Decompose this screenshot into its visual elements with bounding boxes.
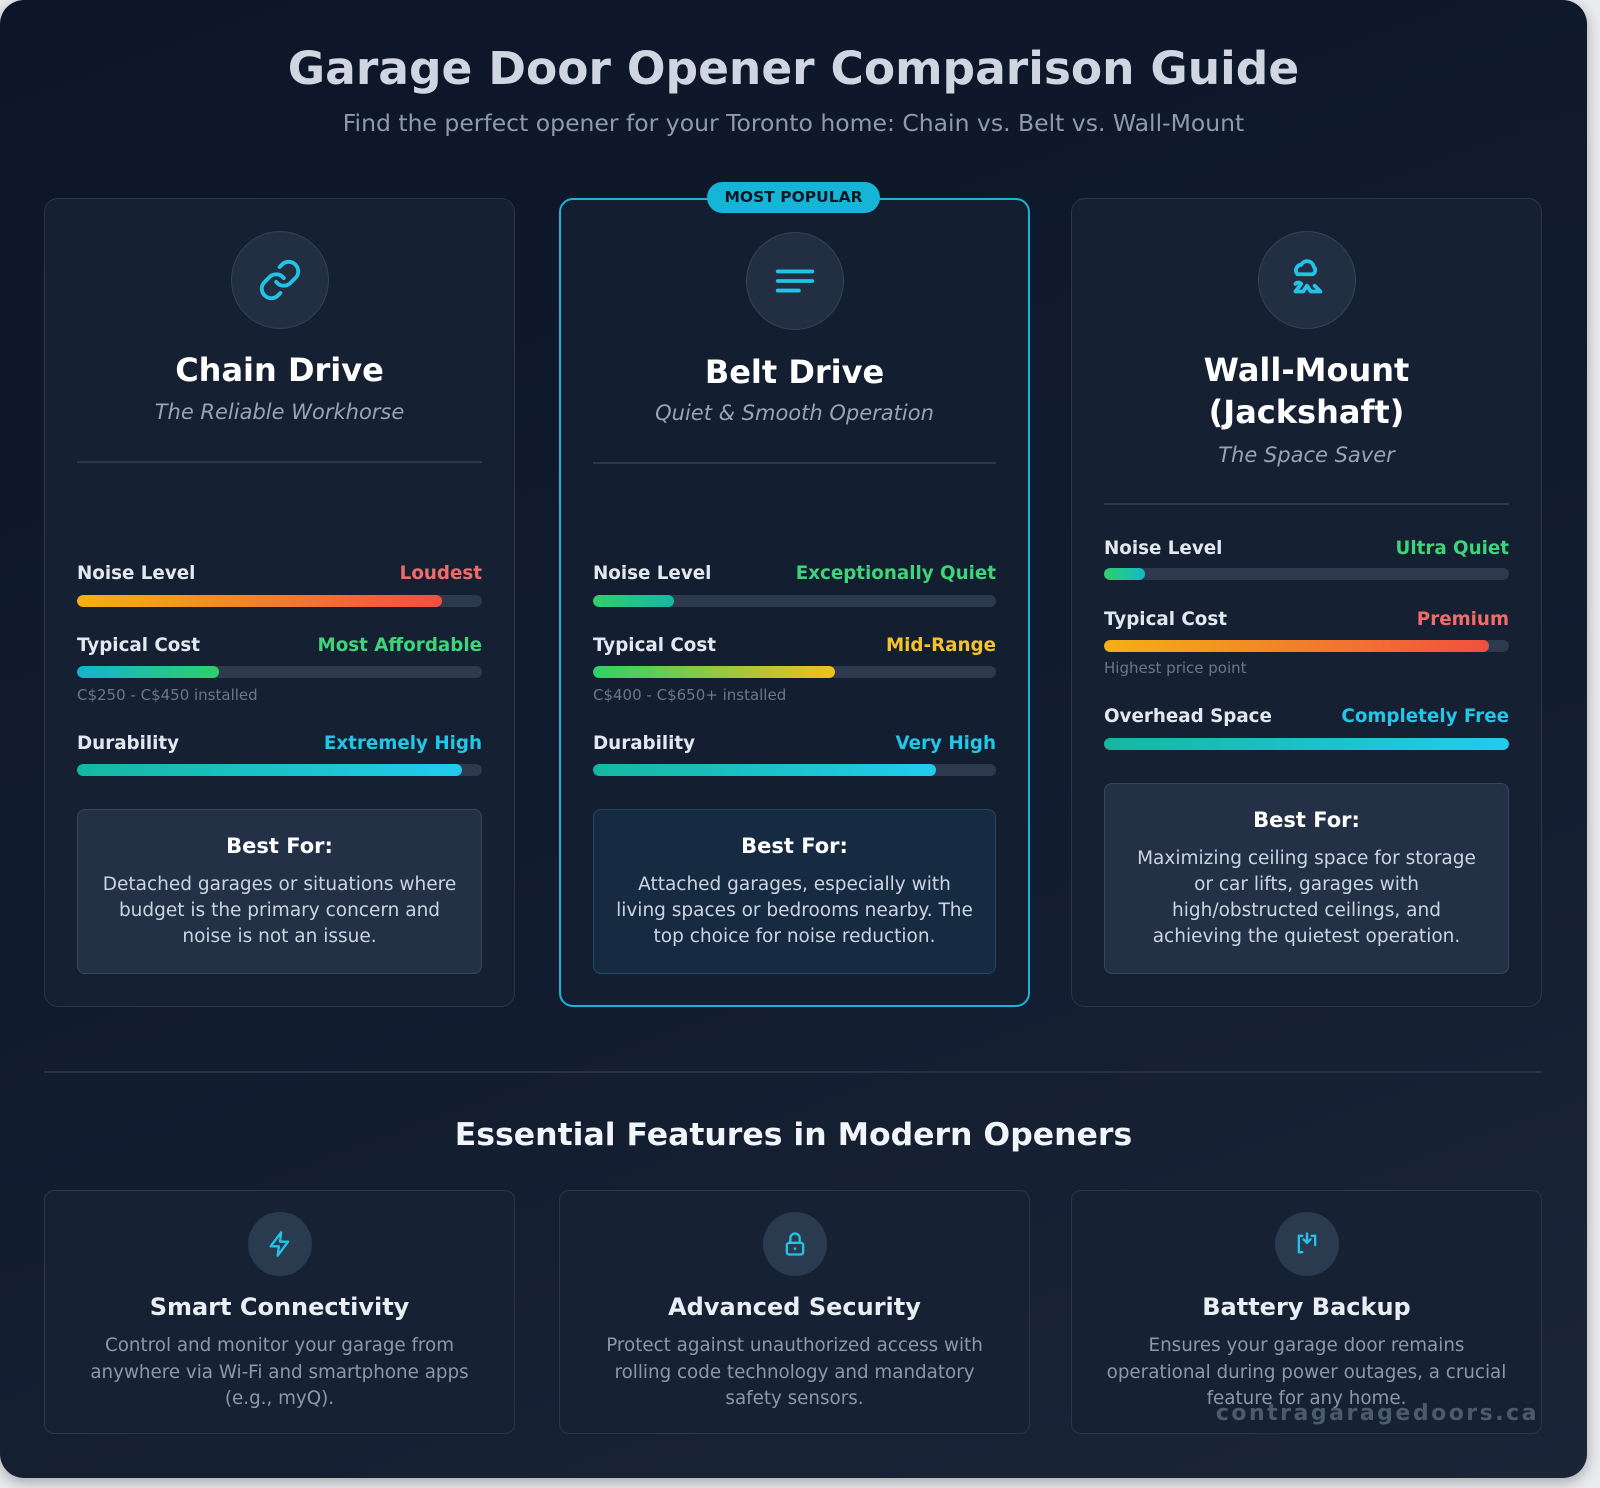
feature: advanced security: Advanced Security — [668, 1293, 921, 1321]
section heading: Essential Features in Modern Openers — [455, 1117, 1132, 1153]
bar: durability — [77, 764, 482, 776]
best for box: Best For: — [1253, 808, 1360, 832]
metric: noise — [1104, 538, 1509, 559]
metric: noise: Noise Level — [77, 563, 195, 584]
best for box — [593, 809, 996, 974]
subtitle: Find the perfect opener for your Toronto home: Chain vs. Belt vs. Wall-Mount — [343, 109, 1244, 137]
title: Garage Door Opener Comparison Guide — [288, 42, 1299, 95]
metric: noise — [77, 563, 482, 584]
best for box: Attached garages, especially with living spaces or bedrooms nearby. The top choice for noise reduction. — [616, 874, 973, 947]
best for box — [1104, 783, 1509, 974]
metric: durability: Durability — [593, 733, 695, 754]
metric: durability: Very High — [895, 733, 996, 754]
metric: noise — [593, 563, 996, 584]
heading — [1204, 351, 1409, 431]
tagline: The Reliable Workhorse — [155, 400, 404, 424]
metric: durability — [593, 733, 996, 754]
metric: noise: Ultra Quiet — [1395, 538, 1509, 559]
feature: battery backup: Ensures your garage door remains operational during power outages, a crucial feature for any home. — [1107, 1335, 1506, 1409]
metric: overhead — [1104, 706, 1509, 727]
badge: most popular: MOST POPULAR — [724, 188, 863, 206]
best for box — [77, 809, 482, 974]
icon: bolt — [248, 1212, 312, 1276]
best for box: Detached garages or situations where budget is the primary concern and noise is not an issue. — [103, 874, 456, 947]
bar: noise — [593, 595, 996, 607]
heading: Chain Drive — [175, 351, 384, 389]
bar: noise — [77, 595, 482, 607]
heading: (Jackshaft) — [1209, 393, 1404, 431]
panel: chain drive — [44, 198, 515, 1007]
tagline: Quiet & Smooth Operation — [655, 401, 934, 425]
bar: durability — [593, 764, 996, 776]
metric: noise: Noise Level — [1104, 538, 1222, 559]
metric: overhead: Overhead Space — [1104, 706, 1272, 727]
metric: cost: Typical Cost — [77, 635, 200, 656]
heading: Wall-Mount — [1204, 351, 1409, 389]
bar: overhead — [1104, 738, 1509, 750]
feature: smart connectivity — [44, 1190, 515, 1434]
best for box: Maximizing ceiling space for storage or car lifts, garages with high/obstructed ceilings, and achieving the quietest operation. — [1137, 848, 1476, 947]
panel: belt drive — [559, 198, 1030, 1007]
metric: durability — [77, 733, 482, 754]
metric: cost — [593, 635, 996, 656]
metric: noise: Exceptionally Quiet — [796, 563, 996, 584]
feature: smart connectivity: Control and monitor your garage from anywhere via Wi-Fi and smartphone apps (e.g., myQ). — [90, 1335, 469, 1409]
best for box: Best For: — [226, 834, 333, 858]
icon: backup — [1275, 1212, 1339, 1276]
metric: cost: Mid-Range — [886, 635, 996, 656]
metric: cost: Most Affordable — [318, 635, 482, 656]
feature: battery backup — [1071, 1190, 1542, 1434]
bar: cost — [1104, 640, 1509, 652]
best for box: Best For: — [741, 834, 848, 858]
metric: durability: Extremely High — [324, 733, 482, 754]
icon: chain link — [231, 231, 329, 329]
metric: durability: Durability — [77, 733, 179, 754]
panel: wall-mount — [1071, 198, 1542, 1007]
metric: cost: Typical Cost — [593, 635, 716, 656]
metric: cost: Premium — [1417, 609, 1509, 630]
metric: overhead: Completely Free — [1341, 706, 1509, 727]
feature: smart connectivity: Smart Connectivity — [150, 1293, 409, 1321]
icon: lock — [763, 1212, 827, 1276]
badge: most popular — [707, 182, 880, 213]
metric: noise: Loudest — [400, 563, 482, 584]
note: price: C$400 - C$650+ installed — [593, 686, 786, 704]
icon: space saver — [1258, 231, 1356, 329]
heading: Belt Drive — [705, 353, 884, 391]
bar: cost — [77, 666, 482, 678]
metric: noise: Noise Level — [593, 563, 711, 584]
feature: advanced security — [559, 1190, 1030, 1434]
metric: cost: Typical Cost — [1104, 609, 1227, 630]
tagline: The Space Saver — [1218, 443, 1395, 467]
metric: cost — [1104, 609, 1509, 630]
icon: belt lines — [746, 232, 844, 330]
feature: battery backup: Battery Backup — [1202, 1293, 1411, 1321]
bar: noise — [1104, 568, 1509, 580]
note: price: C$250 - C$450 installed — [77, 686, 258, 704]
metric: cost — [77, 635, 482, 656]
note: price: Highest price point — [1104, 659, 1247, 677]
watermark: contragaragedoors.ca — [1216, 1401, 1539, 1426]
bar: cost — [593, 666, 996, 678]
feature: advanced security: Protect against unauthorized access with rolling code technology and mandatory safety sensors. — [606, 1335, 983, 1409]
